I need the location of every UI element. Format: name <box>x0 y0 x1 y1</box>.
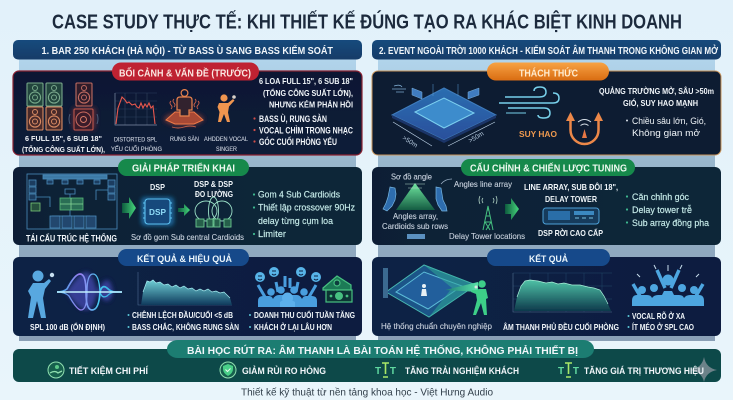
list: solution steps: Limiter <box>258 229 286 240</box>
list: acoustic results: CHÊNH LỆCH ĐẦU/CUỐI <5 dB <box>132 309 233 320</box>
list: vocal results <box>628 310 695 332</box>
list: solution steps: delay từng cụm loa <box>258 216 334 227</box>
text: chart caption: DISTORTED SPL <box>114 136 157 144</box>
pill: results heading: KẾT QUẢ <box>529 253 568 265</box>
benefit: reduce failure risk <box>220 362 326 378</box>
icon: sound wave <box>57 272 122 310</box>
list: challenge points: Không gian mở <box>632 128 700 138</box>
label: angle array caption <box>382 212 448 239</box>
pill: results heading: KẾT QUẢ & HIỆU QUẢ <box>137 253 232 265</box>
label: DSP and measurement <box>194 179 233 199</box>
footer credit: Thiết kế kỹ thuật từ nền tảng khoa học - Việt Hưng Audio <box>241 386 493 398</box>
list: problems: VOCAL CHÌM TRONG NHẠC <box>259 126 354 136</box>
pill: results heading <box>487 249 610 266</box>
text: chart caption: YẾU CUỐI PHÒNG <box>111 143 162 153</box>
list: solution steps: Thiết lập crossover 90Hz <box>258 203 355 214</box>
diagram: coverage stage <box>383 265 478 317</box>
pill: configuration heading <box>461 159 635 176</box>
icon: attenuation U arrow <box>566 112 603 144</box>
text: rebuild caption: TÁI CẤU TRÚC HỆ THỐNG <box>26 232 117 244</box>
text: context summary <box>259 76 353 110</box>
text: context summary: 6 LOA FULL 15", 6 SUB 18" <box>259 76 353 86</box>
chart: flat response <box>138 272 232 305</box>
label: device caption: DSP RỜI CAO CẤP <box>538 227 603 238</box>
card: solution <box>13 159 362 245</box>
arrow: to DSP <box>122 197 136 219</box>
diagram: open square stage: >50m <box>401 135 419 149</box>
list: solution steps: Gom 4 Sub Cardioids <box>258 190 340 201</box>
label: angles line array: Angles line array <box>454 180 512 189</box>
text: challenge summary: QUẢNG TRƯỜNG MỞ, SÂU >50m <box>599 87 714 96</box>
icon: DSP device <box>543 208 599 224</box>
text: singer caption <box>204 136 248 153</box>
benefit: customer experience: TĂNG TRẢI NGHIỆM KHÁCH <box>405 365 519 377</box>
lesson tab heading <box>167 340 594 358</box>
panel background strip <box>19 56 356 341</box>
list: vocal results: ÍT MÉO Ở SPL CAO <box>632 321 695 332</box>
pill: configuration heading: CẤU CHỈNH & CHIẾN LƯỢC TUNING <box>470 162 627 175</box>
label: angle array caption: Cardioids sub rows <box>382 222 448 231</box>
arrow: to measurement <box>178 204 190 216</box>
icon: singer green <box>471 280 488 315</box>
icon: happy crowd <box>255 267 321 307</box>
diagram: open square stage <box>392 84 496 149</box>
text: speakers caption <box>22 134 105 154</box>
list: business results: DOANH THU CUỐI TUẦN TĂNG <box>254 309 355 320</box>
icon: full range speakers <box>27 83 62 130</box>
benefit: save cost: TIẾT KIỆM CHI PHÍ <box>69 365 148 377</box>
icon: wind <box>499 87 559 118</box>
text: coverage caption: ÂM THANH PHỦ ĐỀU CUỐI PHÒNG <box>503 321 619 332</box>
text: cardioid caption: Sơ đồ gom Sub central Cardioids <box>131 233 244 242</box>
text: speakers caption: (TỔNG CÔNG SUẤT LỚN), <box>22 144 105 154</box>
text: chart caption <box>111 136 162 153</box>
list: tuning steps: Căn chỉnh góc <box>632 192 689 203</box>
case 1 heading: 1. BAR 250 KHÁCH (HÀ NỘI) - TỪ BASS Ù SANG BASS KIỂM SOÁT <box>42 44 333 57</box>
text: SPL caption: SPL 100 dB (ỔN ĐỊNH) <box>30 321 105 332</box>
benefit: brand value: T T <box>558 366 579 377</box>
pill: challenge heading <box>487 62 609 80</box>
pill: challenge heading: THÁCH THỨC <box>519 66 578 80</box>
label: angle diagram: Sơ đồ angle <box>391 172 433 182</box>
list: tuning steps: Sub array đồng pha <box>632 218 710 229</box>
label: angle array caption: Angles array, <box>393 212 438 221</box>
list: problems <box>253 113 354 147</box>
list: challenge points: Chiều sâu lớn, Gió, <box>632 116 706 126</box>
card: context and problem <box>13 62 362 155</box>
label: config summary: DELAY TOWER <box>545 194 597 204</box>
list: tuning steps <box>626 192 710 229</box>
list: acoustic results <box>128 309 239 332</box>
text: attenuation label: SUY HAO <box>519 129 557 139</box>
benefit: save cost <box>48 362 148 378</box>
chart: distorted SPL <box>115 93 157 125</box>
icon: subwoofers <box>69 83 98 130</box>
label: config summary <box>524 181 618 204</box>
card: configuration <box>372 159 721 245</box>
arrow: to device <box>505 198 519 220</box>
chart: even coverage <box>513 273 612 312</box>
list: tuning steps: Delay tower trễ <box>632 205 692 216</box>
text: challenge summary <box>599 87 714 108</box>
pill: context heading <box>112 62 259 80</box>
icon: floor vibration <box>164 90 204 128</box>
lesson bar <box>13 340 721 382</box>
text: context summary: (TỔNG CÔNG SUẤT LỚN), <box>263 87 353 98</box>
icon: singer blue <box>28 270 54 318</box>
benefit: customer experience: T T <box>375 366 396 377</box>
card: results event <box>372 249 721 336</box>
panel background strip <box>378 56 715 341</box>
pill: context heading: BỐI CẢNH & VẤN ĐỀ (TRƯỚC) <box>119 66 251 80</box>
list: problems: GÓC CUỐI PHÒNG YẾU <box>259 136 337 147</box>
pill: solution heading <box>118 159 249 176</box>
diagram: cardioid sub <box>195 197 232 227</box>
pill: solution heading: GIẢI PHÁP TRIỂN KHAI <box>132 162 235 174</box>
list: business results: KHÁCH Ở LẠI LÂU HƠN <box>254 321 332 332</box>
list: solution steps <box>253 190 355 240</box>
icon: hidden vocal singer <box>218 94 236 122</box>
diagram: open square stage: >50m <box>468 130 485 145</box>
list: vocal results: VOCAL RÕ Ở XA <box>632 310 685 321</box>
icon: cheering crowd <box>632 265 704 306</box>
icon: DSP chip: DSP <box>149 207 166 217</box>
icon: DSP chip <box>141 197 174 226</box>
card: results <box>13 249 362 336</box>
benefit: brand value <box>558 357 717 382</box>
card: challenge <box>372 62 721 155</box>
list: acoustic results: BASS CHẮC, KHÔNG RUNG SÀN <box>132 321 239 332</box>
text: pro system caption: Hệ thống chuẩn chuyên nghiệp <box>381 322 493 331</box>
case 2 heading <box>372 40 721 60</box>
panel: case 2 event <box>372 40 721 341</box>
list: business results <box>249 309 355 332</box>
panel: case 1 bar <box>13 40 362 341</box>
label: delay tower caption: Delay Tower locations <box>449 232 525 241</box>
label: DSP and measurement: ĐO LƯỜNG <box>195 188 233 199</box>
text: context summary: NHƯNG KÉM PHẢN HỒI <box>269 98 353 110</box>
diagram: line array angles <box>383 179 452 211</box>
case 1 heading <box>13 40 362 60</box>
text: singer caption: SINGER <box>216 146 237 153</box>
icon: money <box>323 276 352 302</box>
label: config summary: LINE ARRAY, SUB ĐÔI 18", <box>524 181 618 192</box>
pill: results heading <box>118 249 249 266</box>
benefit: brand value: TĂNG GIÁ TRỊ THƯƠNG HIỆU <box>584 365 704 377</box>
label: DSP: DSP <box>150 182 165 192</box>
text: challenge summary: GIÓ, SUY HAO MẠNH <box>623 99 698 108</box>
benefit: customer experience <box>375 363 519 377</box>
text: singer caption: AHDDEN VOCAL <box>204 136 248 143</box>
text: speakers caption: 6 FULL 15", 6 SUB 18" <box>25 134 102 143</box>
text: floor vibration caption: RUNG SÀN <box>170 134 199 143</box>
diagram: system layout <box>27 174 117 229</box>
icon: delay tower <box>479 196 497 230</box>
list: problems: BASS Ù, RUNG SÀN <box>259 113 327 124</box>
list: challenge points <box>626 116 706 138</box>
label: DSP and measurement: DSP & DSP <box>194 179 233 189</box>
lesson tab heading: BÀI HỌC RÚT RA: ÂM THANH LÀ BÀI TOÁN HỆ THỐNG, KHÔNG PHẢI THIẾT BỊ <box>187 343 578 357</box>
benefit: reduce failure risk: GIẢM RỦI RO HỎNG <box>242 365 326 377</box>
